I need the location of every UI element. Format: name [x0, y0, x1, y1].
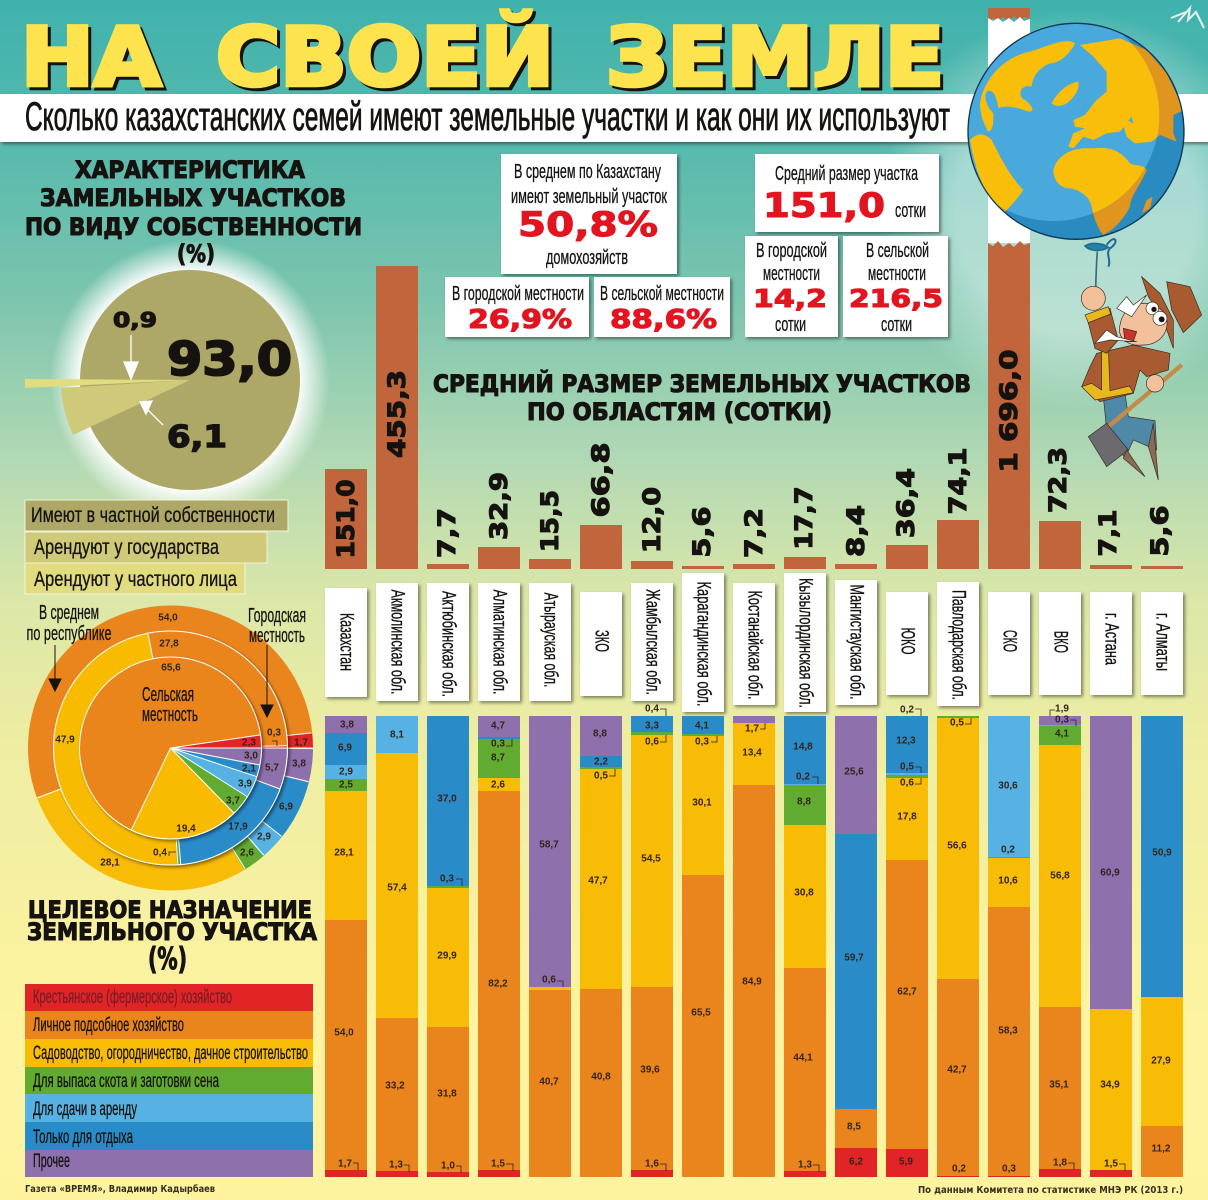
- donut values: 2,9: [257, 832, 271, 842]
- icon: globe balloon: [967, 23, 1202, 480]
- ring: rural: [80, 657, 262, 839]
- title: НА: [24, 14, 164, 107]
- title: НА: [21, 11, 161, 104]
- column: СКО: [988, 716, 1030, 1177]
- region name labels: г. Астана: [1100, 613, 1122, 665]
- title: СВОЕЙ: [216, 10, 554, 104]
- column: Актюбинская: 31,8: [437, 1088, 457, 1100]
- column: Алматинская: 82,2: [488, 978, 508, 990]
- column: СКО: 30,6: [998, 780, 1018, 792]
- balloon knot and string: [1085, 239, 1116, 310]
- column: Жамбылская: 0,6: [645, 736, 659, 748]
- coat: [1082, 345, 1170, 402]
- region name labels: Алматинская обл.: [488, 590, 510, 694]
- column: Алматинская: 8,7: [491, 752, 505, 764]
- column: Казахстан: 28,1: [334, 848, 354, 858]
- region name labels: ВКО: [1050, 631, 1070, 653]
- callout: average plot size: местности: [868, 263, 926, 285]
- column: г. Астана: [1090, 716, 1132, 1177]
- bar values: 7,1: [1094, 510, 1122, 556]
- column: ЗКО: 2,2: [594, 756, 608, 768]
- column: ЮКО: 0,6: [900, 778, 914, 788]
- column: Кызылординская: 0,2: [796, 772, 810, 782]
- ring: urban: [54, 631, 288, 865]
- column: Атырауская: 58,7: [539, 840, 559, 850]
- column: Жамбылская: 39,6: [640, 1064, 660, 1076]
- legend: land purpose: Садоводство, огородничество, дачное строительство: [33, 1043, 308, 1064]
- column: Жамбылская: 1,6: [645, 1158, 659, 1170]
- column: Актюбинская: 29,9: [437, 950, 457, 962]
- column: ЗКО: 8,8: [593, 728, 607, 740]
- column: Актюбинская: 0,3: [440, 874, 454, 884]
- callout: average plot size: сотки: [775, 314, 806, 336]
- column: ЗКО: 40,8: [591, 1072, 611, 1082]
- callout: average plot size: В городской: [756, 240, 827, 262]
- column: ЮКО: 17,8: [897, 812, 917, 822]
- legend: ownership: Имеют в частной собственности: [31, 504, 275, 527]
- legend: land purpose: Личное подсобное хозяйство: [33, 1015, 184, 1036]
- column: Казахстан: 1,7: [338, 1158, 352, 1170]
- callout: households share: В сельской местности: [600, 283, 724, 305]
- column: ВКО: 4,1: [1055, 728, 1069, 740]
- label: rural: Сельская: [142, 684, 194, 706]
- column: Карагандинская: 0,3: [695, 736, 709, 748]
- bar values: 15,5: [536, 490, 564, 552]
- legend: land purpose: Для выпаса скота и заготовки сена: [33, 1071, 219, 1092]
- legend: land purpose: Прочее: [33, 1151, 70, 1172]
- region name labels: ЗКО: [590, 630, 612, 652]
- column: Кызылординская: 1,3: [798, 1160, 812, 1170]
- column: Жамбылская: 0,4: [645, 704, 659, 714]
- callout: households share: имеют земельный участок: [511, 186, 667, 208]
- title: ЗЕМЛЕ: [606, 11, 944, 104]
- column: Алматинская: 1,5: [491, 1158, 505, 1170]
- callout: average plot size: сотки: [881, 314, 912, 336]
- heading: average size by region: ПО ОБЛАСТЯМ (СОТКИ): [527, 398, 832, 426]
- column: Павлодарская: [937, 716, 979, 1177]
- column: Мангистауская: 6,2: [849, 1156, 863, 1168]
- callout: households share: В городской местности: [452, 283, 584, 305]
- donut values: 65,6: [161, 662, 181, 674]
- pie values: 6,1: [167, 420, 227, 455]
- bar chart: average plot size by region: [325, 8, 1183, 569]
- pie values: 0,9: [113, 308, 157, 332]
- region name labels: г. Алматы: [1152, 613, 1172, 671]
- column: г. Алматы: 11,2: [1152, 1144, 1171, 1154]
- column: ЮКО: 62,7: [897, 986, 917, 998]
- column: г. Алматы: 50,9: [1152, 848, 1172, 858]
- region name labels: Карагандинская обл.: [692, 582, 714, 706]
- column: ВКО: 1,9: [1055, 704, 1069, 714]
- callout: average plot size: 14,2: [753, 284, 827, 313]
- callout: households share: 88,6%: [610, 305, 717, 335]
- donut values: 3,7: [226, 796, 240, 806]
- bar values: 74,1: [944, 448, 972, 514]
- broken bar: СКО: [988, 8, 1030, 569]
- column: Казахстан: 6,9: [338, 742, 352, 754]
- title: СВОЕЙ: [219, 13, 557, 107]
- column: г. Алматы: [1141, 716, 1183, 1177]
- column: Казахстан: [325, 716, 367, 1177]
- legend: ownership: [25, 500, 288, 594]
- heading: land purpose: ЦЕЛЕВОЕ НАЗНАЧЕНИЕ: [28, 896, 312, 924]
- column: Жамбылская: [631, 704, 673, 1177]
- column: Актюбинская: 37,0: [437, 794, 457, 804]
- column: ЗКО: 47,7: [588, 876, 608, 886]
- bar values: 7,7: [433, 508, 461, 558]
- legend: ownership: Арендуют у государства: [34, 536, 219, 559]
- label: republic average: [26, 602, 112, 645]
- slice: private lease: [25, 379, 190, 388]
- column: Кызылординская: 30,8: [794, 888, 814, 898]
- bar values: 72,3: [1044, 447, 1072, 513]
- donut values: 0,4: [153, 848, 167, 858]
- legend: land purpose: Только для отдыха: [33, 1127, 133, 1148]
- hands: [1081, 286, 1105, 310]
- column: Алматинская: 4,7: [491, 720, 505, 732]
- region name labels: Акмолинская обл.: [386, 590, 408, 694]
- bar values: 12,0: [638, 487, 666, 553]
- legend: land purpose: Для сдачи в аренду: [33, 1099, 137, 1120]
- column: Карагандинская: 65,5: [691, 1008, 711, 1018]
- column: Кызылординская: 8,8: [797, 796, 811, 808]
- column: Алматинская: 2,6: [491, 780, 505, 790]
- legend: land purpose: Крестьянское (фермерское) хозяйство: [33, 987, 232, 1008]
- column: г. Астана: 34,9: [1100, 1080, 1120, 1090]
- column: ВКО: 35,1: [1049, 1080, 1069, 1090]
- donut values: 0,3: [267, 728, 281, 738]
- callout: households share: домохозяйств: [546, 247, 628, 269]
- face: [1119, 303, 1167, 345]
- column: ВКО: 56,8: [1050, 870, 1070, 882]
- column: Павлодарская: 0,5: [950, 718, 964, 728]
- slice: state lease: [61, 380, 190, 435]
- column: Костанайская: 1,7: [745, 724, 759, 734]
- pie values: [113, 308, 292, 455]
- column: Мангистауская: 59,7: [844, 952, 864, 964]
- label: rural: местность: [142, 704, 198, 726]
- arrow: 0,9: [124, 335, 138, 379]
- bar values: 32,9: [485, 472, 513, 540]
- column: Карагандинская: [682, 716, 724, 1177]
- hat: [1142, 277, 1173, 348]
- column: Акмолинская: 1,3: [389, 1160, 403, 1170]
- column: Костанайская: [733, 716, 775, 1177]
- callout: households share: 26,9%: [468, 305, 572, 335]
- column: Жамбылская: 3,3: [645, 720, 659, 732]
- column: Кызылординская: [784, 716, 826, 1177]
- column: ВКО: 1,8: [1053, 1158, 1067, 1168]
- column: Мангистауская: [835, 716, 877, 1177]
- callout: households share: В среднем по Казахстану: [514, 161, 661, 183]
- donut values: 17,9: [228, 822, 248, 832]
- arrow: republic average: [49, 645, 61, 691]
- donut values: 3,0: [244, 750, 258, 762]
- column: Акмолинская: 33,2: [385, 1080, 405, 1092]
- heading: land purpose: ЗЕМЕЛЬНОГО УЧАСТКА: [27, 918, 317, 946]
- source footer: По данным Комитета по статистике МНЭ РК (2013 г.): [918, 1185, 1183, 1196]
- column: ЮКО: 0,5: [900, 762, 914, 772]
- source footer: [25, 1184, 1183, 1196]
- region name labels: Кызылординская обл.: [794, 578, 816, 708]
- callout: average plot size: сотки: [895, 200, 926, 222]
- legend: ownership: Арендуют у частного лица: [34, 568, 237, 591]
- column: Павлодарская: 0,2: [952, 1164, 966, 1174]
- bar values: 455,3: [383, 370, 411, 458]
- donut values: 2,1: [242, 764, 256, 774]
- callout: households share: [445, 154, 730, 337]
- column: г. Алматы: 27,9: [1151, 1056, 1171, 1066]
- stacked bars: land purpose by region: [325, 704, 1183, 1177]
- column: СКО: 10,6: [998, 876, 1018, 886]
- pie values: 93,0: [167, 332, 292, 386]
- column: Кызылординская: 44,1: [793, 1052, 813, 1064]
- column: ЮКО: 5,9: [899, 1156, 913, 1168]
- title: [21, 10, 947, 107]
- label: urban: Городская: [248, 605, 306, 627]
- region name labels: Жамбылская обл.: [642, 589, 662, 695]
- heading: ownership: (%): [177, 240, 215, 268]
- column: Казахстан: 2,9: [339, 766, 353, 778]
- column: СКО: 0,2: [1001, 844, 1015, 856]
- ring: republic average: [38, 677, 312, 869]
- bar values: 17,7: [790, 486, 818, 550]
- callout: average plot size: Средний размер участка: [775, 163, 919, 185]
- column: Казахстан: 3,8: [340, 720, 354, 730]
- donut chart: land purpose: [26, 602, 312, 869]
- bar values: 151,0: [332, 480, 360, 558]
- heading: land purpose: [27, 896, 317, 977]
- callout: average plot size: местности: [763, 263, 820, 285]
- column: Кызылординская: 14,8: [793, 742, 813, 752]
- column: Актюбинская: 1,0: [441, 1160, 455, 1172]
- column: Карагандинская: 4,1: [695, 720, 709, 732]
- cartoon farmer: [1081, 277, 1202, 480]
- bar values: 5,6: [1146, 506, 1174, 556]
- donut values: 2,3: [242, 738, 256, 748]
- heading: average size by region: [433, 369, 971, 426]
- region name labels: Атырауская обл.: [540, 592, 560, 688]
- region name labels: Актюбинская обл.: [438, 591, 458, 697]
- column: ЮКО: 0,2: [900, 704, 914, 716]
- arrow: urban: [261, 645, 273, 717]
- column: СКО: 0,3: [1002, 1164, 1016, 1174]
- region name labels: Костанайская обл.: [744, 591, 764, 699]
- region name labels: СКО: [998, 630, 1020, 652]
- bar values: 66,8: [587, 442, 615, 518]
- donut values: 47,9: [55, 734, 75, 746]
- column: Акмолинская: [376, 716, 418, 1177]
- bar values: 1 696,0: [995, 350, 1023, 472]
- column: ВКО: [1039, 704, 1081, 1177]
- column: Актюбинская: [427, 716, 469, 1177]
- column: Костанайская: 13,4: [742, 748, 762, 758]
- donut values: 1,7: [294, 738, 308, 748]
- trousers: [1103, 393, 1157, 458]
- label: urban: [248, 605, 306, 647]
- heading: ownership: [25, 156, 362, 268]
- region name labels: ЮКО: [896, 628, 918, 654]
- bar values: 36,4: [892, 468, 920, 538]
- column: Алматинская: 0,3: [491, 738, 505, 750]
- callout: average plot size: В сельской: [866, 240, 929, 262]
- column: Казахстан: 2,5: [339, 780, 353, 790]
- donut values: 3,9: [238, 778, 252, 790]
- region name labels: [325, 573, 1183, 712]
- callout: average plot size: 216,5: [849, 284, 943, 313]
- column: Акмолинская: 8,1: [390, 730, 404, 740]
- callout: average plot size: [745, 154, 948, 337]
- artist signature: [1171, 8, 1204, 28]
- donut values: 2,6: [240, 848, 254, 858]
- heading: ownership: ПО ВИДУ СОБСТВЕННОСТИ: [25, 213, 362, 241]
- donut values: [55, 612, 308, 868]
- donut values: 5,7: [265, 762, 279, 774]
- donut values: 28,1: [100, 858, 120, 868]
- column: Костанайская: 84,9: [742, 976, 762, 988]
- column: ЮКО: [886, 704, 928, 1177]
- column: ВКО: 0,3: [1055, 714, 1069, 726]
- region name labels: Казахстан: [336, 613, 356, 671]
- label: urban: местность: [249, 625, 305, 647]
- region name labels: Мангистауская обл.: [846, 584, 866, 700]
- bar values: 8,4: [842, 505, 870, 557]
- column: Мангистауская: 25,6: [844, 766, 864, 778]
- heading: land purpose: (%): [148, 942, 187, 977]
- column: Жамбылская: 54,5: [641, 854, 661, 864]
- column: Павлодарская: 42,7: [947, 1064, 967, 1076]
- column: Атырауская: [529, 716, 571, 1177]
- column: г. Астана: 1,5: [1104, 1158, 1118, 1170]
- column: Алматинская: [478, 716, 520, 1177]
- hoe: [1108, 365, 1182, 427]
- heading: ownership: ЗАМЕЛЬНЫХ УЧАСТКОВ: [40, 184, 346, 212]
- label: republic average: В среднем: [39, 602, 99, 624]
- donut values: 27,8: [159, 638, 179, 650]
- column: Мангистауская: 8,5: [847, 1122, 861, 1132]
- donut values: 3,8: [292, 758, 306, 770]
- donut values: 19,4: [176, 824, 196, 834]
- pie chart: ownership: [25, 270, 300, 490]
- heading: ownership: ХАРАКТЕРИСТИКА: [75, 156, 305, 184]
- label: rural: [142, 684, 198, 726]
- column: г. Астана: 60,9: [1100, 868, 1120, 878]
- donut values: 54,0: [158, 612, 178, 624]
- label: republic average: по республике: [26, 623, 112, 645]
- column: Атырауская: 0,6: [542, 974, 556, 986]
- callout: households share: 50,8%: [518, 205, 658, 245]
- column: ЗКО: [580, 716, 622, 1177]
- bar values: 5,6: [688, 506, 716, 558]
- column: Казахстан: 54,0: [334, 1028, 354, 1038]
- source footer: Газета «ВРЕМЯ», Владимир Кадырбаев: [25, 1184, 215, 1195]
- column: ЗКО: 0,5: [594, 770, 608, 782]
- heading: average size by region: СРЕДНИЙ РАЗМЕР ЗЕМЕЛЬНЫХ УЧАСТКОВ: [433, 369, 971, 398]
- region name labels: Павлодарская обл.: [948, 590, 968, 700]
- legend: land purpose: [25, 984, 313, 1177]
- donut values: 6,9: [279, 802, 293, 812]
- column: ЮКО: 12,3: [896, 736, 916, 746]
- bar values: [332, 350, 1174, 558]
- title: ЗЕМЛЕ: [609, 14, 947, 107]
- column: Акмолинская: 57,4: [387, 882, 407, 894]
- callout: average plot size: 151,0: [763, 186, 885, 226]
- column: Карагандинская: 30,1: [692, 798, 712, 808]
- bar values: 7,2: [740, 508, 768, 558]
- column: Атырауская: 40,7: [539, 1076, 559, 1088]
- arrow: 6,1: [140, 401, 163, 425]
- column: Павлодарская: 56,6: [947, 840, 967, 852]
- column: СКО: 58,3: [998, 1026, 1018, 1036]
